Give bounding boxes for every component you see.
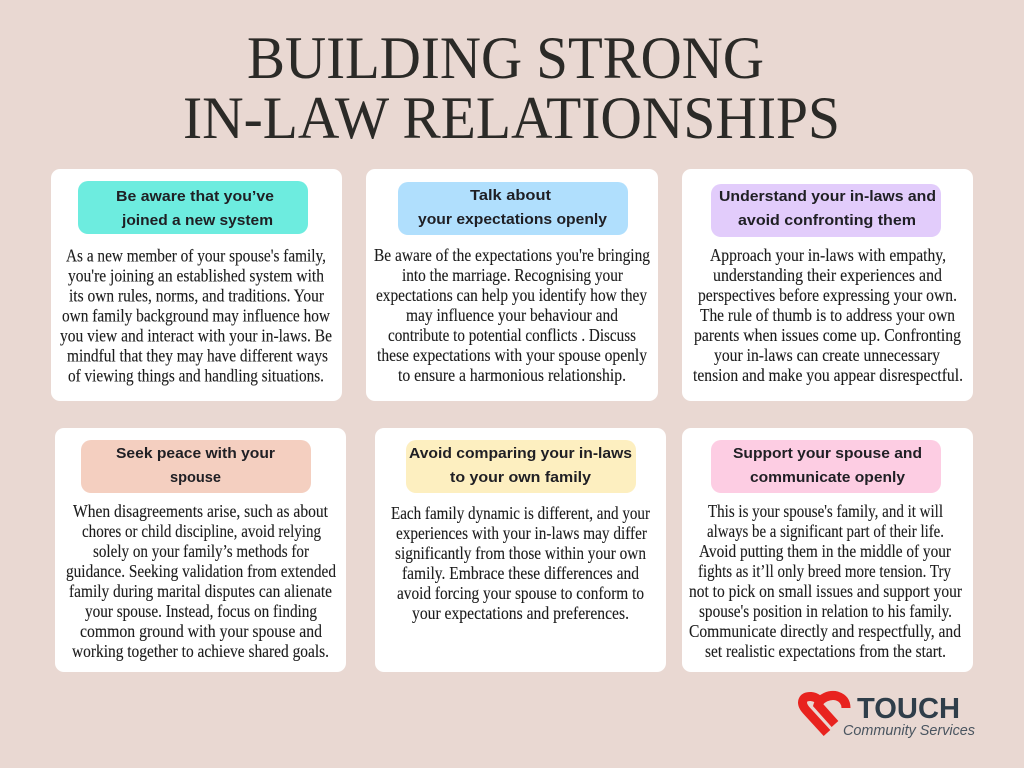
text: understand body: tension and make you appear disrespectful. [693,365,963,385]
text: be aware body: mindful that they may have different ways [67,346,328,366]
text: avoid comparing body [391,503,650,623]
text: be aware body: own family background may influence how [62,306,330,326]
text: avoid comparing body: experiences with your in-laws may differ [396,523,647,543]
heading: avoid comparing [406,440,636,493]
text: seek peace body: guidance. Seeking validation from extended [66,561,336,581]
heading: understand: avoid confronting them [738,212,916,229]
icon: red heart [803,695,846,733]
text: support spouse body: fights as it’ll only breed more tension. Try [698,561,951,581]
heading: talk about [398,182,628,235]
text: talk about body: expectations can help you identify how they [376,285,647,305]
text: avoid comparing body: Each family dynamic is different, and your [391,503,650,523]
title [183,25,840,151]
text: talk about body: to ensure a harmonious relationship. [398,365,626,385]
heading: understand: Understand your in-laws and [719,188,936,205]
text: be aware body: its own rules, norms, and traditions. Your [69,286,324,306]
text: support spouse body: not to pick on small issues and support your [689,581,962,601]
text: be aware body: you're joining an established system with [68,266,324,286]
heading: understand [711,184,941,237]
panel: understand [682,169,973,401]
heading: be aware: joined a new system [121,212,273,229]
title: BUILDING STRONG [247,25,764,91]
text: support spouse body [689,501,962,661]
title: IN-LAW RELATIONSHIPS [183,85,840,151]
text: seek peace body: When disagreements arise, such as about [73,501,328,521]
panel: talk about [366,169,658,401]
heading: avoid comparing: Avoid comparing your in-laws [409,445,632,462]
heading: support spouse: Support your spouse and [733,445,922,462]
text: seek peace body [66,501,336,661]
text: talk about body: contribute to potential conflicts . Discuss [388,325,636,345]
logo: TOUCH Community Services: Community Services [843,723,975,739]
text: talk about body: into the marriage. Recognising your [402,265,623,285]
text: be aware body: of viewing things and handling situations. [68,366,324,386]
text: seek peace body: solely on your family’s methods for [93,541,309,561]
text: understand body: Approach your in-laws with empathy, [710,245,946,265]
text: support spouse body: Avoid putting them in the middle of your [699,541,951,561]
text: talk about body: Be aware of the expectations you're bringing [374,245,650,265]
heading: support spouse: communicate openly [750,469,906,486]
heading: talk about: Talk about [470,187,551,204]
text: avoid comparing body: significantly from those within your own [395,543,646,563]
text: avoid comparing body: avoid forcing your spouse to conform to [397,583,644,603]
panel: avoid comparing [375,428,666,672]
text: be aware body: you view and interact with your in-laws. Be [60,326,332,346]
heading: be aware [78,181,308,234]
text: understand body: The rule of thumb is to address your own [700,305,955,325]
heading: seek peace: Seek peace with your [116,445,275,462]
text: seek peace body: common ground with your spouse and [80,621,322,641]
logo: TOUCH Community Services: TOUCH [857,693,960,725]
heading: be aware: Be aware that you’ve [116,188,274,205]
heading: avoid comparing: to your own family [450,469,592,486]
heading: seek peace [81,440,311,493]
text: support spouse body: Communicate directly and respectfully, and [689,621,961,641]
text: understand body: perspectives before expressing your own. [698,285,957,305]
text: seek peace body: working together to achieve shared goals. [72,641,329,661]
text: seek peace body: your spouse. Instead, focus on finding [85,601,317,621]
text: support spouse body: This is your spouse's family, and it will [708,501,943,521]
text: support spouse body: spouse's position in relation to his family. [699,601,952,621]
heading: seek peace: spouse [170,469,221,486]
text: support spouse body: always be a significant part of their life. [707,521,944,541]
panel: support spouse [682,428,973,672]
text: be aware body: As a new member of your spouse's family, [66,246,326,266]
text: support spouse body: set realistic expectations from the start. [705,641,946,661]
text: understand body [693,245,963,385]
text: be aware body [60,246,332,386]
text: understand body: parents when issues come up. Confronting [694,325,961,345]
text: talk about body: these expectations with your spouse openly [377,345,647,365]
text: avoid comparing body: family. Embrace these differences and [402,563,639,583]
logo: TOUCH Community Services [803,693,975,739]
text: talk about body: may influence your behaviour and [406,305,618,325]
text: understand body: understanding their experiences and [713,265,942,285]
panel: be aware [51,169,342,401]
text: avoid comparing body: your expectations and preferences. [412,603,629,623]
heading: support spouse [711,440,941,493]
text: seek peace body: chores or child discipline, avoid relying [82,521,321,541]
text: seek peace body: family during marital disputes can alienate [69,581,332,601]
text: understand body: your in-laws can create unnecessary [714,345,940,365]
text: talk about body [374,245,650,385]
heading: talk about: your expectations openly [418,211,608,228]
panel: seek peace [55,428,346,672]
